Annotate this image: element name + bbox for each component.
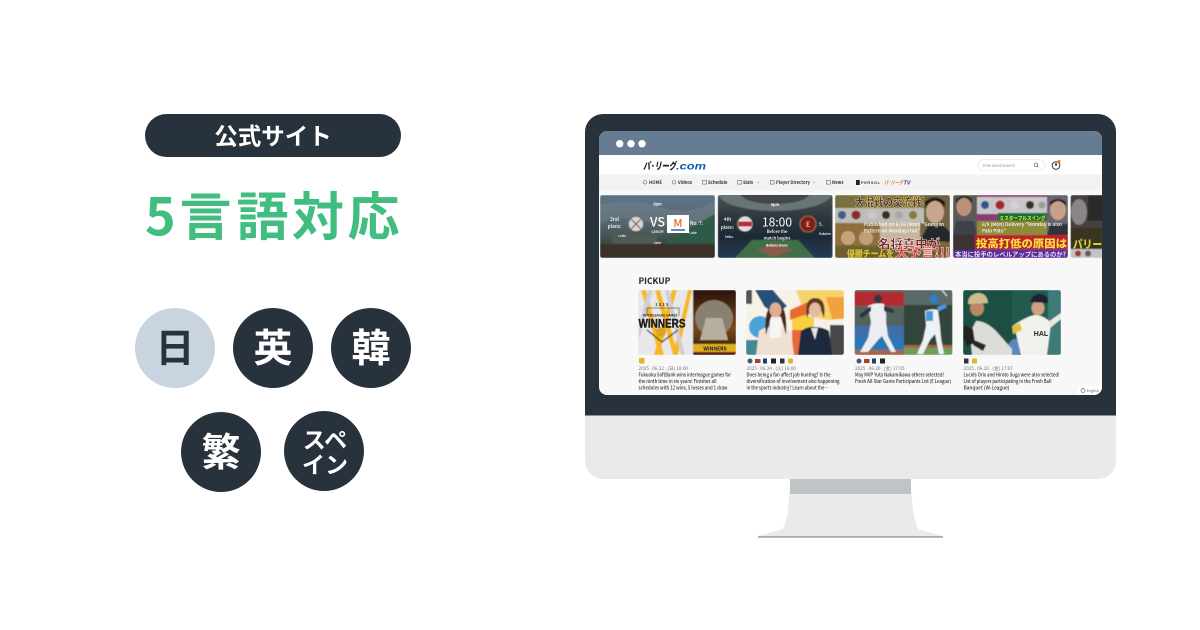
carousel card 3: video thumbnail: 名将真中が [878, 235, 940, 252]
pickup card 1: schedules with 12 wins, 5 losses and 1 draw [638, 384, 728, 392]
navigation bar: Stats [743, 180, 754, 186]
site logo [643, 160, 706, 170]
language button: Traditional Chinese [181, 412, 261, 492]
carousel card 1: game score: 6pm [653, 202, 662, 208]
browser title bar [599, 131, 1102, 155]
language button: English: 英 [253, 318, 293, 374]
carousel card 3: video thumbnail: Pattern on Mondays too" [864, 228, 920, 234]
carousel card 2: game start time: Seibu [725, 235, 733, 239]
pickup heading: PICKUP [638, 275, 671, 287]
label pill: official site [145, 114, 401, 157]
user icon [1052, 160, 1060, 169]
carousel card 2: game start time [718, 195, 833, 258]
language switch badge [1080, 387, 1102, 395]
pickup card 3: Fresh All-Star Game Participants List (E League) [855, 378, 951, 385]
language button: Japanese (active): 日 [155, 318, 195, 374]
pickup card 4: 2025 . 06.20 . (金) 17:07 [964, 365, 1013, 372]
pickup card 2: Does being a fan affect job hunting? Is the [746, 372, 831, 378]
pickup card 1: Fukuoka SoftBank wins interleague games for [638, 372, 731, 378]
monitor body [585, 114, 1116, 479]
carousel card 3: video thumbnail: Published on 6/16 (Mon) "Going to [864, 221, 944, 228]
carousel card 1: game score: 2nd [610, 216, 619, 223]
navigation bar: Schedule [708, 179, 728, 186]
thumbnail: winners: 2025 [655, 303, 670, 308]
carousel card 5: partial thumbnail [1070, 195, 1103, 258]
team logos [964, 358, 977, 364]
language button: Korean: 韓 [351, 318, 391, 374]
language button: English [233, 308, 313, 388]
carousel card 5: partial thumbnail: パリー [1073, 236, 1102, 252]
carousel card 1: game score: Lotte [654, 241, 661, 245]
team logo [639, 358, 644, 364]
monitor stand [758, 479, 943, 538]
thumbnail: winners [638, 290, 736, 355]
carousel card 3: video thumbnail: 大混戦の交流戦! [855, 194, 925, 210]
label pill: official site: 公式サイト [214, 118, 332, 152]
site header [643, 160, 1060, 171]
carousel card 2: game start time: 4th [724, 216, 731, 223]
partner logos: パ·リーグ [884, 178, 904, 186]
pickup card 4 [963, 290, 1061, 392]
carousel card 4: video thumbnail: ミスターフルスイング [1000, 214, 1046, 222]
thumbnail: two pitchers: HAL [1034, 331, 1049, 338]
pickup card 2 [746, 290, 844, 392]
partner logos [856, 180, 911, 185]
pickup card 1: 2025 . 06.22 . (日) 18:00 [638, 366, 688, 372]
carousel card 4: video thumbnail: 6/9 (Mon) Delivery "Monday is also [982, 221, 1062, 228]
language button: Japanese (active) [135, 308, 215, 388]
carousel card 4: video thumbnail: 本当に投手のレベルアップにあるのか? [955, 250, 1066, 258]
language button: Traditional Chinese: 繁 [201, 422, 241, 478]
carousel card 1: game score: place: [608, 223, 622, 230]
language button: Korean [331, 308, 411, 388]
thumbnail: winners: WINNERS [703, 346, 727, 352]
carousel card 2: game start time: 5. [819, 222, 824, 228]
navigation bar: Videos [677, 179, 693, 186]
language switch badge: English [1087, 389, 1099, 394]
navigation bar: News [832, 180, 844, 186]
partner logos: TV [904, 180, 912, 186]
search box: Free word search [983, 163, 1015, 169]
carousel card 2: game start time: 6pm [771, 203, 780, 208]
carousel card 3: video thumbnail: 優勝チームを [847, 247, 894, 260]
pickup card 4: Lucids Orix and Hiroto Suga were also selected! [964, 372, 1060, 378]
partner logos: PERSOL [861, 181, 881, 185]
carousel card 1: game score: No. 7: [690, 220, 704, 227]
carousel card 1: game score: Lotte [689, 231, 697, 235]
pickup card 2: diversification of involvement also happening [746, 378, 840, 385]
navigation bar: HOME [649, 180, 662, 186]
language button: Spanish: イン [302, 446, 348, 480]
carousel card 2: game start time: Before the [767, 229, 788, 235]
carousel card 1: game score: Lotte [618, 234, 626, 238]
monitor illustration [585, 114, 1116, 538]
carousel card 2: game start time: Rakuten [819, 232, 831, 236]
carousel card 3: video thumbnail: 大予言!!! [895, 242, 950, 262]
carousel card 2: game start time: 18:00 [762, 214, 792, 230]
pickup card 4: Banquet (W-League) [964, 384, 1010, 392]
carousel card 2: game start time: E [806, 220, 810, 230]
navigation bar [642, 180, 911, 185]
pickup card 1 [638, 290, 736, 392]
search box [978, 160, 1045, 170]
team logos [856, 358, 885, 364]
thumbnail: two women [746, 290, 844, 355]
pickup card 3: May MVP Yuta Nakamikawa others selected! [855, 372, 944, 378]
pickup card 2: 2025 . 06.24 . (火) 18:00 [746, 366, 796, 372]
language buttons [135, 308, 411, 492]
carousel card 1: game score [600, 195, 715, 258]
pickup card 2: in the sports industry? Learn about the⋯ [746, 384, 829, 392]
language button: Spanish: スペ [303, 421, 347, 455]
thumbnail: winners: INTERLEAGUE GAMES [643, 312, 677, 318]
heading: five language support: 5言語対応 [145, 176, 400, 250]
thumbnail: winners: WINNERS [638, 316, 686, 330]
carousel card 3: video thumbnail [835, 194, 950, 262]
thumbnail: two batters [854, 289, 952, 355]
language button: Spanish [284, 411, 364, 491]
carousel card 1: game score: VS [649, 212, 665, 230]
carousel card 4: video thumbnail [953, 195, 1068, 258]
carousel card 4: video thumbnail: 投高打低の原因は [976, 236, 1068, 251]
navigation bar: Player Directory [776, 179, 810, 186]
browser screen [599, 131, 1104, 397]
carousel card 4: video thumbnail: Pato Pato" [982, 228, 1006, 234]
pickup card 3 [854, 289, 952, 385]
pickup card 4: List of players participating in the Fresh Ball [964, 378, 1052, 385]
team logos [748, 358, 793, 364]
carousel card 2: game start time: match begins [764, 234, 790, 242]
pickup card 1: the ninth time in six years! Finishes all [638, 378, 717, 385]
site logo: パ·リーグ [643, 158, 677, 172]
carousel card 2: game start time: Belluna Dome [766, 242, 788, 248]
carousel card 1: game score: M [673, 215, 683, 231]
site logo: .com [676, 160, 706, 172]
carousel card 1: game score: cancel [651, 229, 664, 235]
pickup card 3: 2025 . 06.20 . (金) 17:05 [855, 365, 905, 372]
carousel card 2: game start time: place: [721, 225, 735, 231]
